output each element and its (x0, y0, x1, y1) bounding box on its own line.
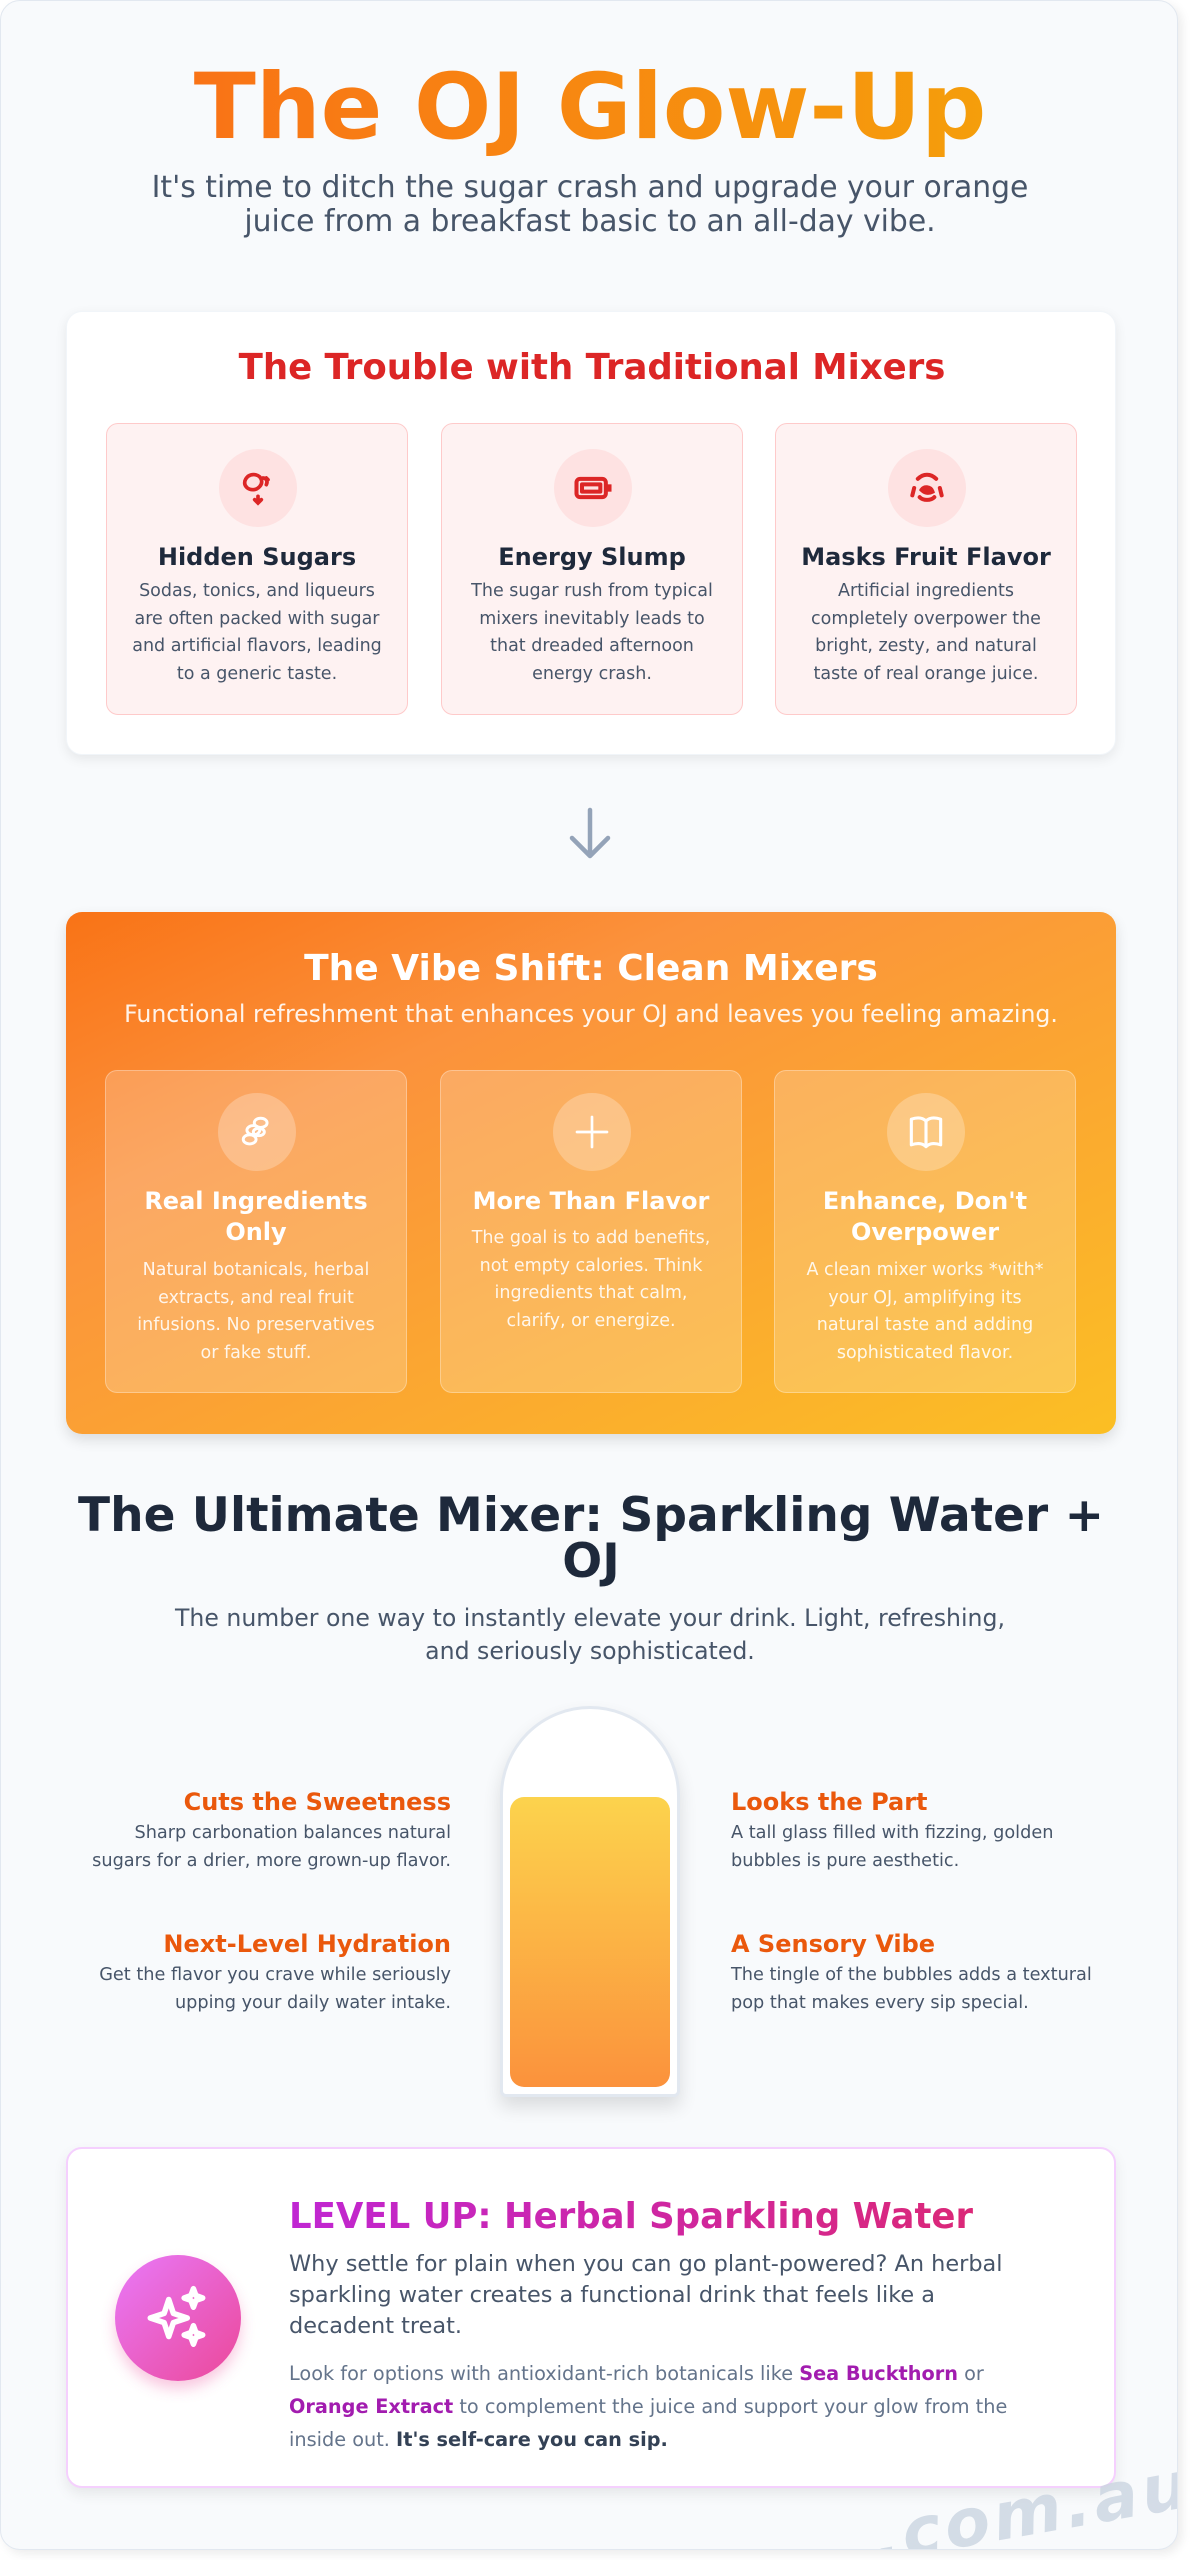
card: real ingredients: Real Ingredients (144, 1187, 368, 1215)
card: hidden sugars: Sodas, tonics, and liqueurs are often packed with sugar and artificial flavors, leading to a generic taste. (132, 581, 382, 684)
card: masks fruit flavor: Masks Fruit Flavor (801, 543, 1051, 571)
card: real ingredients: Only (225, 1218, 287, 1246)
card: more than flavor: More Than Flavor (473, 1187, 709, 1215)
heading: ultimate mixer: The Ultimate Mixer: Sparkling Water + OJ (78, 1488, 1104, 1589)
text: intro: Why settle for plain when you can go plant-powered? An herbal sparkling water creates a functional drink that feels like a (289, 2251, 1002, 2308)
text: botanicals: Look for options with antioxidant-rich botanicals like Sea Buckthorn or Orange Extract to complement the juice and support your glow from the inside out. It's self-care you can sip. (289, 2362, 1007, 2451)
panel: vibe shift clean mixers (66, 912, 1116, 1434)
card: more than flavor: The goal is to add benefits, not empty calories. Think ingredients that calm, clarify, or energize. (472, 1228, 710, 1330)
subheading: ultimate mixer: The number one way to instantly elevate your drink. Light, refreshing, and seriously sophisticated. (175, 1604, 1005, 1665)
feature: a sensory vibe: The tingle of the bubbles adds a textural pop that makes every sip special. (731, 1965, 1092, 2013)
subtitle: It's time to ditch the sugar crash and upgrade your orange juice from a breakfast basic to an all-day vibe. (152, 170, 1028, 239)
feature: next-level hydration (99, 1930, 451, 2013)
feature: a sensory vibe (730, 1930, 1092, 2013)
card: enhance don't overpower: Overpower (851, 1218, 999, 1246)
icon: botanicals (218, 1093, 296, 1171)
card: hidden sugars: Hidden Sugars (158, 543, 356, 571)
subheading: Functional refreshment that enhances your OJ and leaves you feeling amazing. (124, 1000, 1058, 1028)
feature: a sensory vibe: A Sensory Vibe (731, 1930, 935, 1958)
card: real ingredients: Natural botanicals, herbal extracts, and real fruit infusions. No preservatives or fake stuff. (137, 1260, 375, 1362)
card: masks fruit flavor (775, 423, 1077, 715)
card: energy slump (441, 423, 743, 715)
icon: book (887, 1093, 965, 1171)
heading: level up: LEVEL UP: Herbal Sparkling Water (289, 2196, 973, 2237)
card: masks fruit flavor: Artificial ingredients completely overpower the bright, zesty, and natural taste of real orange juice. (811, 581, 1041, 684)
card: enhance don't overpower: Enhance, Don't (823, 1187, 1027, 1215)
icon: sparkles (115, 2255, 241, 2381)
panel: trouble with traditional mixers (66, 311, 1116, 755)
heading: vibe shift: The Vibe Shift: Clean Mixers (304, 948, 878, 989)
feature: cuts the sweetness: Cuts the Sweetness (184, 1788, 451, 1816)
card: enhance don't overpower: A clean mixer works *with* your OJ, amplifying its natural taste and adding sophisticated flavor. (806, 1260, 1044, 1362)
icon: sugar (219, 449, 297, 527)
feature: cuts the sweetness: Sharp carbonation balances natural sugars for a drier, more grown-up flavor. (92, 1823, 451, 1871)
feature: next-level hydration: Get the flavor you crave while seriously upping your daily water intake. (99, 1965, 451, 2013)
card: energy slump: The sugar rush from typical mixers inevitably leads to that dreaded afternoon energy crash. (471, 581, 713, 684)
illustration: glass of sparkling OJ (500, 1706, 680, 2097)
feature: looks the part (731, 1788, 1053, 1871)
arrow: down (570, 808, 610, 858)
feature: next-level hydration: Next-Level Hydration (163, 1930, 451, 1958)
card: more than flavor (440, 1070, 742, 1393)
heading: trouble: The Trouble with Traditional Mixers (239, 347, 945, 388)
card: energy slump: Energy Slump (498, 543, 686, 571)
panel: level up herbal sparkling water (66, 2147, 1116, 2488)
text: intro: decadent treat. (289, 2313, 462, 2339)
juice fill (510, 1797, 670, 2087)
card: real ingredients (105, 1070, 407, 1393)
icon: plus (553, 1093, 631, 1171)
text: intro (289, 2251, 1002, 2339)
card: hidden sugars (106, 423, 408, 715)
card: enhance don't overpower (774, 1070, 1076, 1393)
icon: low battery (554, 449, 632, 527)
title: The OJ Glow-Up (194, 55, 986, 160)
feature: looks the part: A tall glass filled with fizzing, golden bubbles is pure aesthetic. (731, 1823, 1053, 1871)
feature: looks the part: Looks the Part (731, 1788, 928, 1816)
feature: cuts the sweetness (92, 1788, 451, 1871)
icon: mask (888, 449, 966, 527)
